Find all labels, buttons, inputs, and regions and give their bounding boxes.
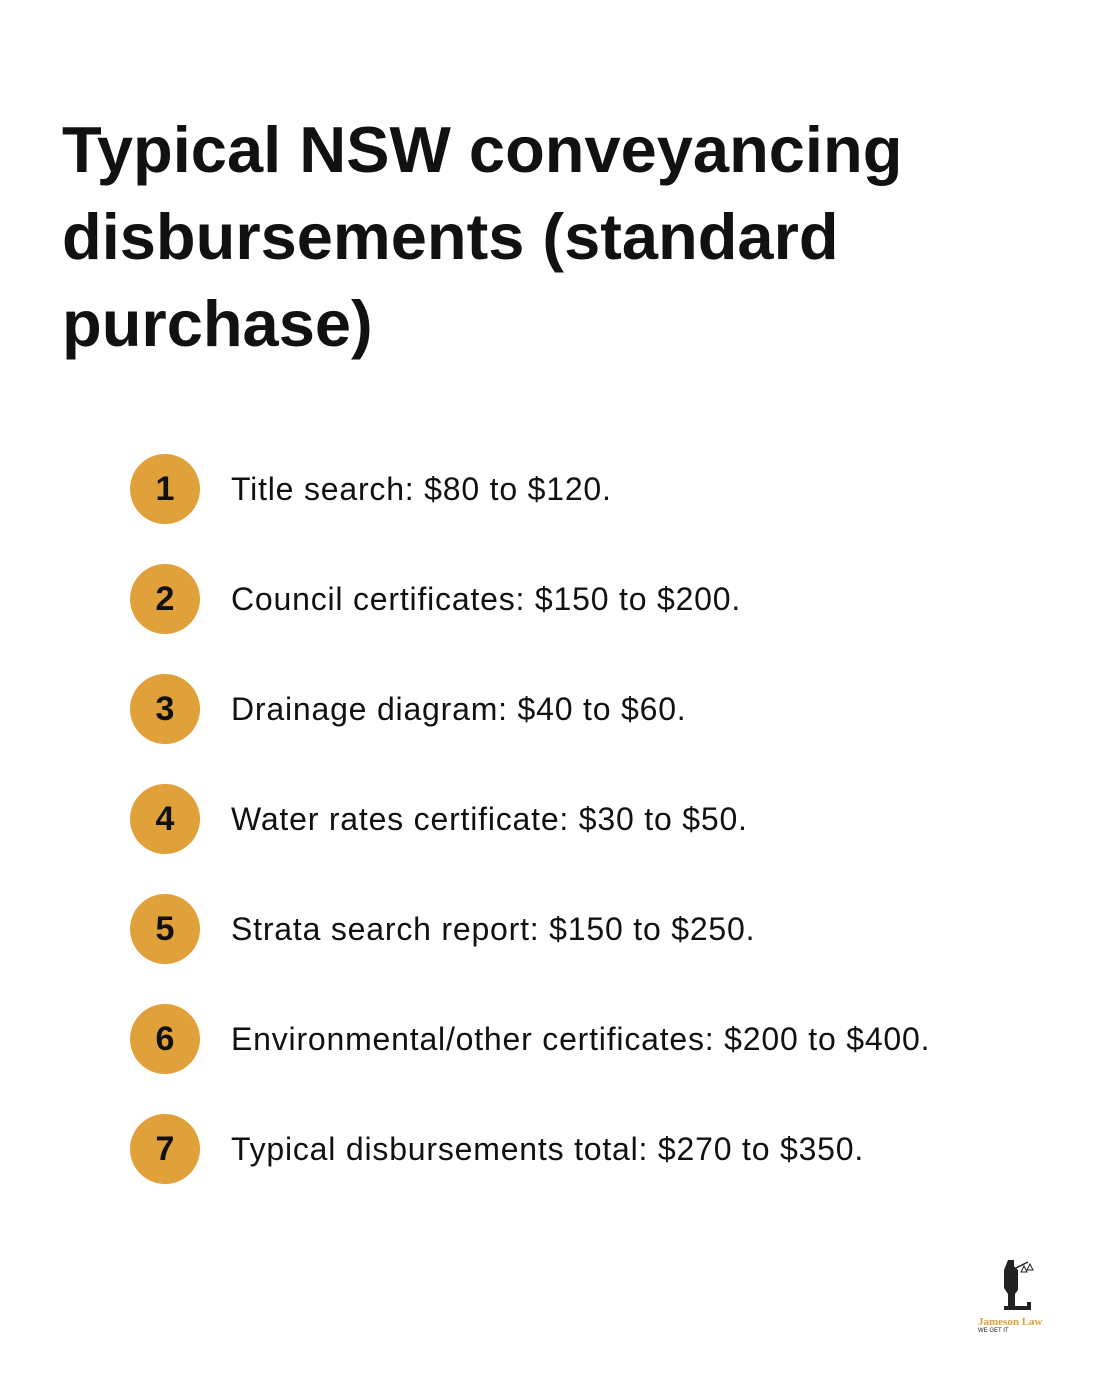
item 7: 7 — [156, 1130, 174, 1168]
logo: Jameson Law — [978, 1316, 1042, 1328]
logo: WE GET IT — [978, 1328, 1009, 1334]
item 3: 3 — [156, 690, 174, 728]
item 1 — [130, 454, 612, 524]
title: Typical NSW conveyancing disbursements (standard purchase) — [62, 113, 902, 360]
item 3: Drainage diagram: $40 to $60. — [231, 691, 686, 727]
item 1: Title search: $80 to $120. — [231, 471, 612, 507]
item 4 — [130, 784, 748, 854]
item 4: 4 — [156, 800, 174, 838]
item 1: 1 — [156, 470, 174, 508]
item 2: 2 — [156, 580, 174, 618]
item 6: Environmental/other certificates: $200 to $400. — [231, 1021, 930, 1057]
item 5: 5 — [156, 910, 174, 948]
logo — [978, 1260, 1042, 1334]
item 4: Water rates certificate: $30 to $50. — [231, 801, 748, 837]
item 6 — [130, 1004, 930, 1074]
item 3 — [130, 674, 686, 744]
item 7: Typical disbursements total: $270 to $350. — [231, 1131, 864, 1167]
item 7 — [130, 1114, 864, 1184]
item 5: Strata search report: $150 to $250. — [231, 911, 755, 947]
item 6: 6 — [156, 1020, 174, 1058]
item 2: Council certificates: $150 to $200. — [231, 581, 741, 617]
item 2 — [130, 564, 741, 634]
item 5 — [130, 894, 755, 964]
